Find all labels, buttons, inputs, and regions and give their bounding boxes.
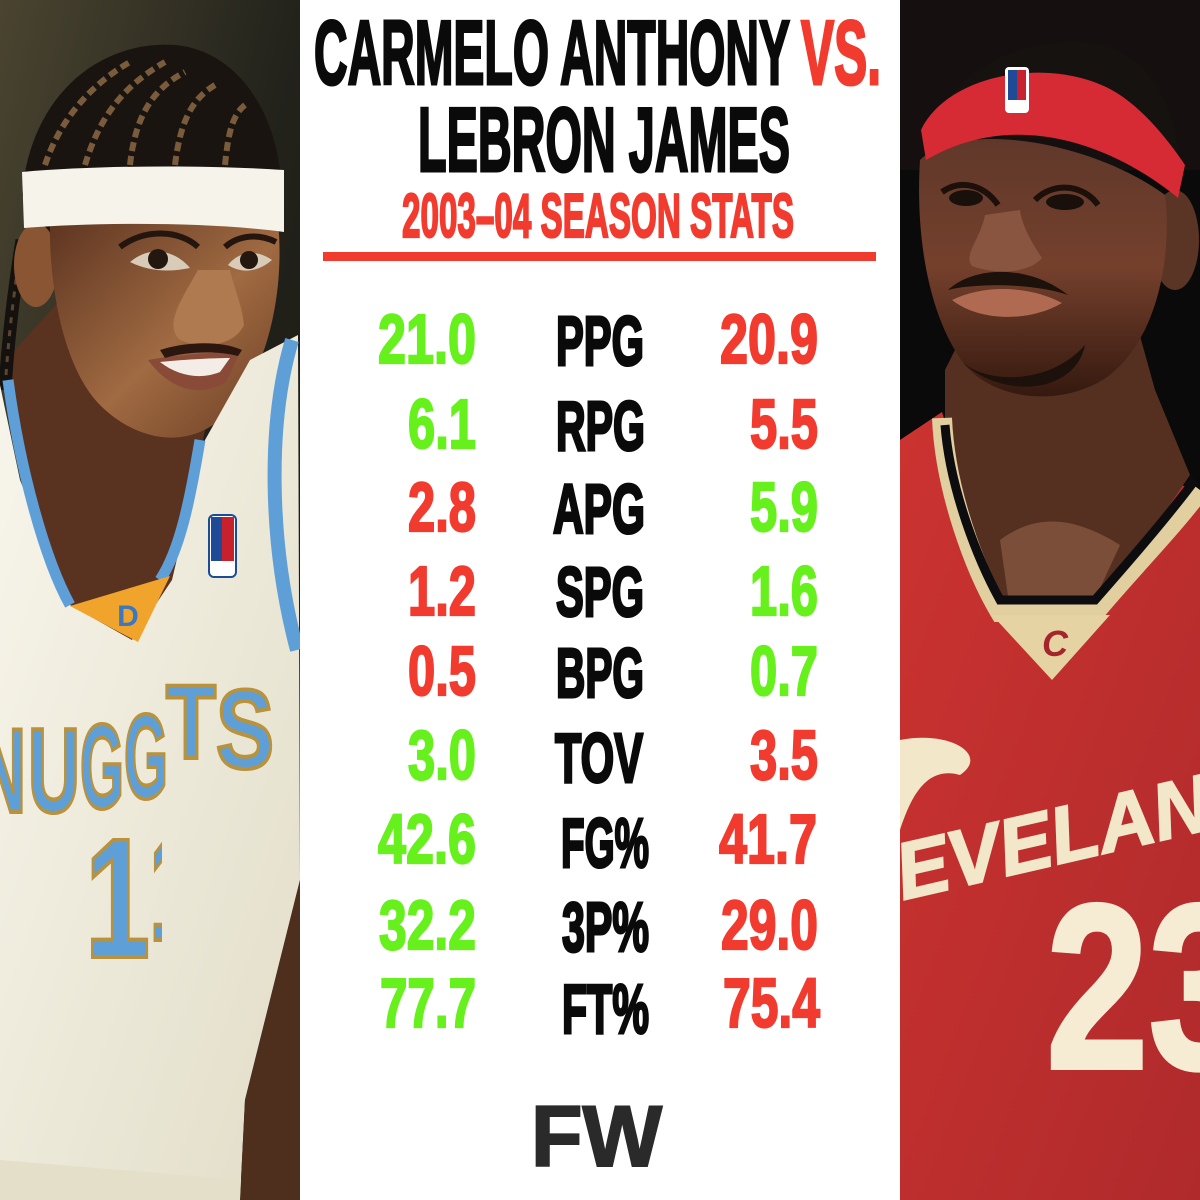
wordmark swoosh [900,738,970,830]
panel: Carmelo Anthony photo: 1 [150,804,190,972]
stats table [378,300,820,1048]
jersey lettering: G [124,690,168,824]
braid [5,240,22,390]
mustache and lips [948,272,1068,295]
panel: Carmelo Anthony photo: D [117,600,139,633]
title: LEBRON JAMES [418,90,790,191]
panel: LeBron James photo [887,0,1200,1200]
row: RPG: 6.1 [408,385,476,463]
headband [921,73,1185,198]
eyes [942,185,1098,205]
row: SPG: SPG [556,553,644,631]
row: FG%: 42.6 [378,800,476,878]
row: TOV: TOV [555,719,643,797]
row: APG: 2.8 [408,468,476,546]
row: FG% [378,800,817,882]
row: APG: APG [553,470,645,548]
row: FG%: FG% [561,804,649,882]
jersey number: 1 [85,804,150,994]
title: VS. [801,3,881,104]
row: APG: 5.9 [750,468,818,546]
row: BPG [408,632,818,712]
hair [22,45,282,240]
row: BPG: 0.5 [408,632,476,710]
neck and chest [5,304,205,640]
neck and chest [945,338,1190,596]
jersey lettering: U [28,704,80,838]
row: 3P% [379,886,818,966]
NBA logo on headband [1005,67,1029,113]
row: FT%: FT% [562,970,649,1048]
eyes [130,252,190,270]
nose [173,270,244,345]
jersey lettering: S [216,667,274,792]
row: BPG: 0.7 [750,632,818,710]
row: 3P%: 29.0 [721,886,818,964]
row: TOV [408,716,818,797]
row: FT%: 75.4 [723,964,820,1042]
headband [22,166,284,232]
panel: LeBron James photo: C [1042,623,1069,664]
jersey [0,335,300,1200]
row: FG%: 41.7 [719,800,817,878]
jersey lettering [0,684,272,815]
subtitle: 2003–04 SEASON STATS [402,182,794,251]
row: RPG: 5.5 [750,385,818,463]
mouth [148,352,240,390]
row: SPG: 1.6 [750,552,818,630]
row: 3P%: 3P% [562,888,649,966]
row: SPG: 1.2 [408,552,476,630]
arm right [240,880,300,1200]
row: FT% [380,964,820,1048]
row: 3P%: 32.2 [379,886,476,964]
title [314,3,881,191]
row: APG [408,468,818,548]
nose [969,210,1042,272]
row: TOV: 3.0 [408,716,476,794]
NBA logo [209,515,236,577]
row: FT%: 77.7 [380,964,476,1042]
row: RPG: RPG [556,387,645,465]
logo: FW: FW [531,1089,663,1185]
jersey lettering: G [80,700,124,834]
row: PPG: PPG [556,302,644,380]
row: SPG [408,552,818,631]
row: PPG: 21.0 [378,300,476,378]
row: TOV: 3.5 [750,716,818,794]
collar [942,418,1200,612]
head [1180,190,1181,191]
ear [14,226,54,307]
divider line [323,252,876,261]
row: PPG [378,300,818,380]
gold collar tab [70,576,170,642]
row: BPG: BPG [556,634,644,712]
row: PPG: 20.9 [720,300,818,378]
panel: Carmelo Anthony photo [0,0,300,1200]
face [50,215,280,438]
row: RPG [408,385,818,465]
jersey [900,412,1200,1200]
jersey lettering: T [166,664,216,781]
